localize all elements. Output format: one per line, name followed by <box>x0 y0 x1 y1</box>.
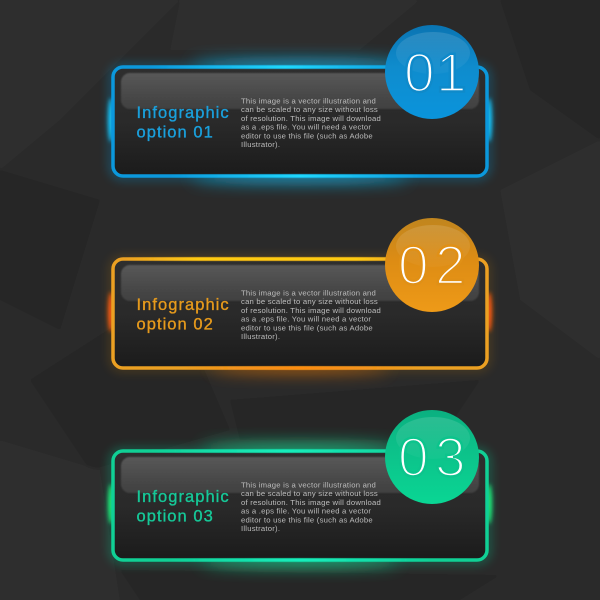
panel 1 description: can be scaled to any size without loss <box>241 105 378 114</box>
panel 3 description: of resolution. This image will download <box>241 498 381 507</box>
panel 3 description: editor to use this file (such as Adobe <box>241 515 373 524</box>
panel 3 title: option 03 <box>136 508 214 526</box>
panel 3 description: as a .eps file. You will need a vector <box>241 507 371 516</box>
panel 2 description: as a .eps file. You will need a vector <box>241 315 371 324</box>
panel 2 glass gloss <box>121 265 479 301</box>
panel 1 title: Infographic <box>136 104 230 122</box>
panel 2 description: editor to use this file (such as Adobe <box>241 323 373 332</box>
panel 2 top edge highlight <box>125 258 415 260</box>
panel 1 number badge: 01 <box>404 42 467 104</box>
panel 3 number badge <box>385 410 479 504</box>
panel 1 body <box>113 67 487 176</box>
panel 3 description: can be scaled to any size without loss <box>241 489 378 498</box>
panel 3 glass gloss <box>121 457 479 493</box>
panel 3 top edge highlight <box>150 450 420 452</box>
panel 2 body <box>113 259 487 368</box>
panel 2 number badge: 02 <box>398 234 466 296</box>
panel 3 number badge: 03 <box>398 426 466 488</box>
panel 2 title: Infographic <box>136 296 230 314</box>
panel 3 title: Infographic <box>136 488 230 506</box>
panel 2 description: This image is a vector illustration and <box>241 288 376 298</box>
panel 1 description: Illustrator). <box>241 140 280 149</box>
panel 2 title: option 02 <box>136 316 214 334</box>
panel 1 description: of resolution. This image will download <box>241 114 381 123</box>
panel 1: blue option <box>108 25 492 182</box>
panel 1 number badge <box>385 25 479 119</box>
panel 1 bottom edge highlight <box>170 174 430 178</box>
panel 3 bottom edge highlight <box>170 558 430 562</box>
panel 3 body <box>113 451 487 560</box>
panel 2 bottom edge highlight <box>180 366 420 370</box>
panel 2 description: of resolution. This image will download <box>241 306 381 315</box>
panel 1 glass gloss <box>121 73 479 109</box>
panel 2 number badge <box>385 218 479 312</box>
panel 3: green option <box>108 410 492 566</box>
panel 1 description: as a .eps file. You will need a vector <box>241 123 371 132</box>
panel 3 description: Illustrator). <box>241 524 280 533</box>
panel 3 description: This image is a vector illustration and <box>241 480 376 490</box>
panel 1 title: option 01 <box>136 124 214 142</box>
panel 2 description: Illustrator). <box>241 332 280 341</box>
panel 3 frame glow <box>108 444 492 566</box>
panel 1 frame glow <box>108 60 492 182</box>
panel 1 top edge highlight <box>150 66 420 68</box>
panel 1 description: editor to use this file (such as Adobe <box>241 131 373 140</box>
panel 2 frame glow <box>108 259 492 372</box>
panel 2 description: can be scaled to any size without loss <box>241 297 378 306</box>
panel 2: orange option <box>108 218 492 372</box>
panel 1 description: This image is a vector illustration and <box>241 96 376 106</box>
